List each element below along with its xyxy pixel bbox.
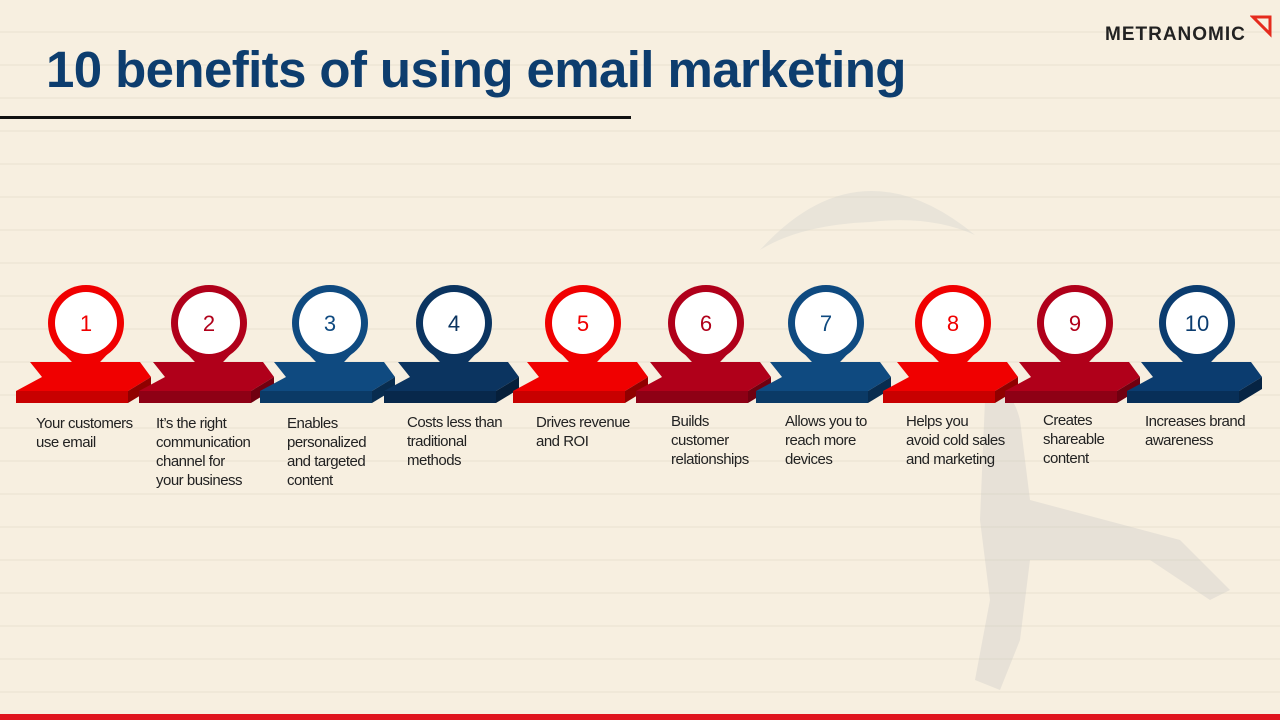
text 2: your business bbox=[156, 472, 242, 489]
text 8: Helps you bbox=[906, 413, 968, 430]
text 6: Builds bbox=[671, 413, 709, 430]
text 2: It’s the right bbox=[156, 415, 226, 432]
text 10: awareness bbox=[1145, 432, 1213, 449]
marker 4 bbox=[384, 285, 519, 403]
marker 3: 3 bbox=[324, 311, 336, 336]
text 7 bbox=[785, 413, 867, 468]
text 7: Allows you to bbox=[785, 413, 867, 430]
text 1 bbox=[36, 415, 133, 451]
text 7: reach more bbox=[785, 432, 856, 449]
text 3: and targeted bbox=[287, 453, 365, 470]
marker 9: 9 bbox=[1069, 311, 1081, 336]
logo bbox=[1105, 16, 1272, 45]
text 4 bbox=[407, 414, 502, 469]
marker 1: 1 bbox=[80, 311, 92, 336]
logo: METRANOMIC bbox=[1105, 24, 1246, 45]
text 5: and ROI bbox=[536, 433, 588, 450]
text 2: communication bbox=[156, 434, 250, 451]
text 4: traditional bbox=[407, 433, 467, 450]
text 4: methods bbox=[407, 452, 461, 469]
text 2: channel for bbox=[156, 453, 225, 470]
marker 5 bbox=[513, 285, 648, 403]
text 10: Increases brand bbox=[1145, 413, 1245, 430]
marker 3 bbox=[260, 285, 395, 403]
marker 9 bbox=[1005, 285, 1140, 403]
text 6: customer bbox=[671, 432, 729, 449]
text 3 bbox=[287, 415, 366, 489]
text 4: Costs less than bbox=[407, 414, 502, 431]
marker 4: 4 bbox=[448, 311, 460, 336]
text 3: personalized bbox=[287, 434, 366, 451]
text 3: Enables bbox=[287, 415, 338, 432]
text 1: use email bbox=[36, 434, 96, 451]
text 10 bbox=[1145, 413, 1245, 449]
text 2 bbox=[156, 415, 250, 489]
text 1: Your customers bbox=[36, 415, 133, 432]
marker 8: 8 bbox=[947, 311, 959, 336]
marker 2: 2 bbox=[203, 311, 215, 336]
marker 5: 5 bbox=[577, 311, 589, 336]
text 8 bbox=[906, 413, 1005, 468]
title: 10 benefits of using email marketing bbox=[46, 41, 906, 98]
text 9: Creates bbox=[1043, 412, 1092, 429]
text 9 bbox=[1043, 412, 1104, 467]
marker 6 bbox=[636, 285, 771, 403]
text 5 bbox=[536, 414, 630, 450]
marker 8 bbox=[883, 285, 1018, 403]
marker 10: 10 bbox=[1185, 311, 1209, 336]
text 9: shareable bbox=[1043, 431, 1104, 448]
text 5: Drives revenue bbox=[536, 414, 630, 431]
text 6 bbox=[671, 413, 749, 468]
marker 1 bbox=[16, 285, 151, 403]
text 8: avoid cold sales bbox=[906, 432, 1005, 449]
marker 10 bbox=[1127, 285, 1262, 403]
marker 2 bbox=[139, 285, 274, 403]
marker 7: 7 bbox=[820, 311, 832, 336]
text 9: content bbox=[1043, 450, 1089, 467]
text 6: relationships bbox=[671, 451, 749, 468]
text 7: devices bbox=[785, 451, 832, 468]
text 8: and marketing bbox=[906, 451, 995, 468]
text 3: content bbox=[287, 472, 333, 489]
marker 7 bbox=[756, 285, 891, 403]
marker 6: 6 bbox=[700, 311, 712, 336]
